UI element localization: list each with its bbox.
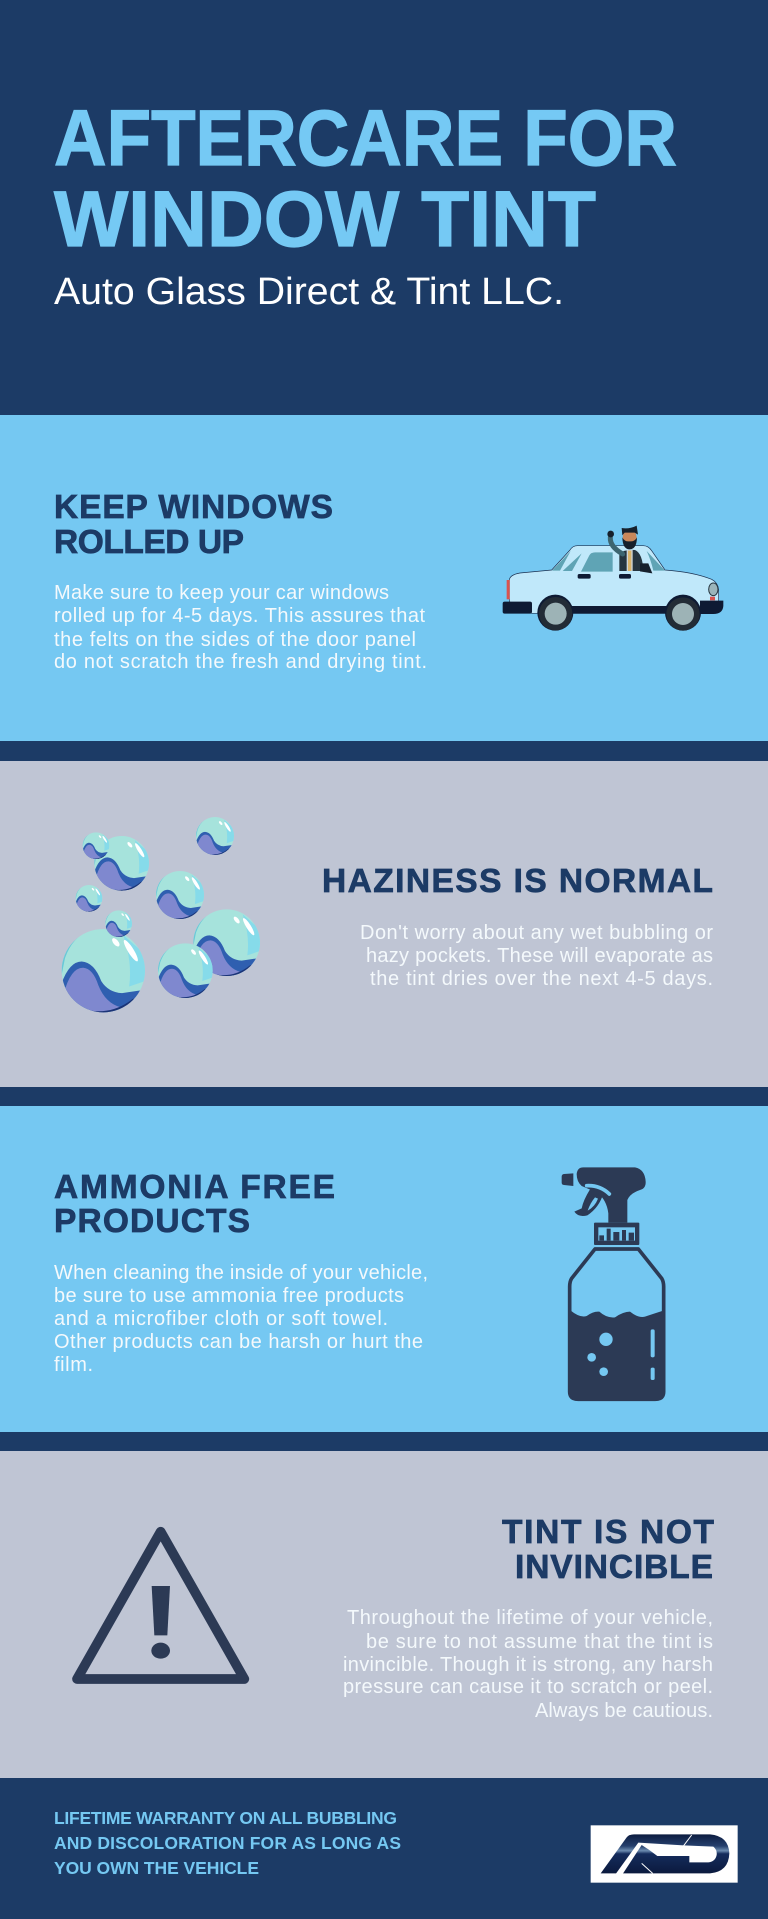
divider band 3 (0, 1432, 768, 1451)
text: haziness body: hazy pockets. These will evaporate as (366, 945, 713, 967)
title (54, 93, 677, 263)
panel: header (0, 0, 768, 415)
logo: AGD (591, 1825, 738, 1883)
title: AFTERCARE FOR (54, 93, 677, 182)
heading: tint is not invincible: INVINCIBLE (515, 1549, 713, 1586)
text: tint body: Throughout the lifetime of your vehicle, (347, 1607, 713, 1629)
title: WINDOW TINT (54, 174, 596, 263)
panel: ammonia free products (0, 1106, 768, 1432)
text: ammonia body: be sure to use ammonia free products (54, 1285, 404, 1307)
text: tint body (343, 1607, 713, 1722)
panel: keep windows rolled up (0, 415, 768, 741)
divider band 2 (0, 1087, 768, 1106)
heading: keep windows rolled up: ROLLED UP (54, 524, 244, 561)
heading: tint is not invincible (502, 1514, 715, 1586)
text: ammonia body (54, 1262, 428, 1376)
text: tint body: pressure can cause it to scratch or peel. (343, 1676, 713, 1698)
text: warranty: AND DISCOLORATION FOR AS LONG AS (54, 1833, 401, 1853)
text: keep windows body: Make sure to keep your car windows (54, 582, 389, 604)
subtitle: Auto Glass Direct & Tint LLC. (54, 271, 564, 313)
text: warranty: LIFETIME WARRANTY ON ALL BUBBLING (54, 1808, 397, 1828)
text: keep windows body: rolled up for 4-5 days. This assures that (54, 605, 425, 627)
divider band 1 (0, 741, 768, 761)
text: warranty (54, 1808, 401, 1878)
heading: haziness is normal: HAZINESS IS NORMAL (322, 863, 713, 900)
text: ammonia body: Other products can be harsh or hurt the (54, 1331, 423, 1353)
heading: keep windows rolled up: KEEP WINDOWS (54, 489, 333, 526)
heading: tint is not invincible: TINT IS NOT (502, 1514, 715, 1551)
text: keep windows body (54, 582, 427, 673)
text: keep windows body: do not scratch the fresh and drying tint. (54, 651, 427, 673)
panel: footer (0, 1778, 768, 1919)
text: warranty: YOU OWN THE VEHICLE (54, 1858, 259, 1878)
heading: ammonia free products: AMMONIA FREE (54, 1169, 335, 1206)
text: haziness body: Don't worry about any wet bubbling or (360, 922, 713, 944)
panel: haziness is normal (0, 761, 768, 1087)
text: tint body: Always be cautious. (535, 1700, 713, 1722)
panel: tint is not invincible (0, 1451, 768, 1778)
text: ammonia body: and a microfiber cloth or soft towel. (54, 1308, 388, 1330)
text: haziness body (360, 922, 713, 990)
text: ammonia body: When cleaning the inside of your vehicle, (54, 1262, 428, 1284)
heading: ammonia free products (54, 1169, 335, 1240)
text: tint body: be sure to not assume that the tint is (366, 1631, 713, 1653)
icon: spray bottle (562, 1167, 664, 1399)
text: ammonia body: film. (54, 1354, 93, 1376)
text: tint body: invincible. Though it is strong, any harsh (343, 1654, 713, 1676)
text: keep windows body: the felts on the sides of the door panel (54, 629, 416, 651)
text: haziness body: the tint dries over the next 4-5 days. (370, 968, 713, 990)
icon: warning triangle (77, 1532, 244, 1679)
icon: car with waving man (503, 526, 723, 631)
icon: bubbles (60, 817, 262, 1016)
heading: ammonia free products: PRODUCTS (54, 1203, 250, 1240)
heading: keep windows rolled up (54, 489, 333, 561)
